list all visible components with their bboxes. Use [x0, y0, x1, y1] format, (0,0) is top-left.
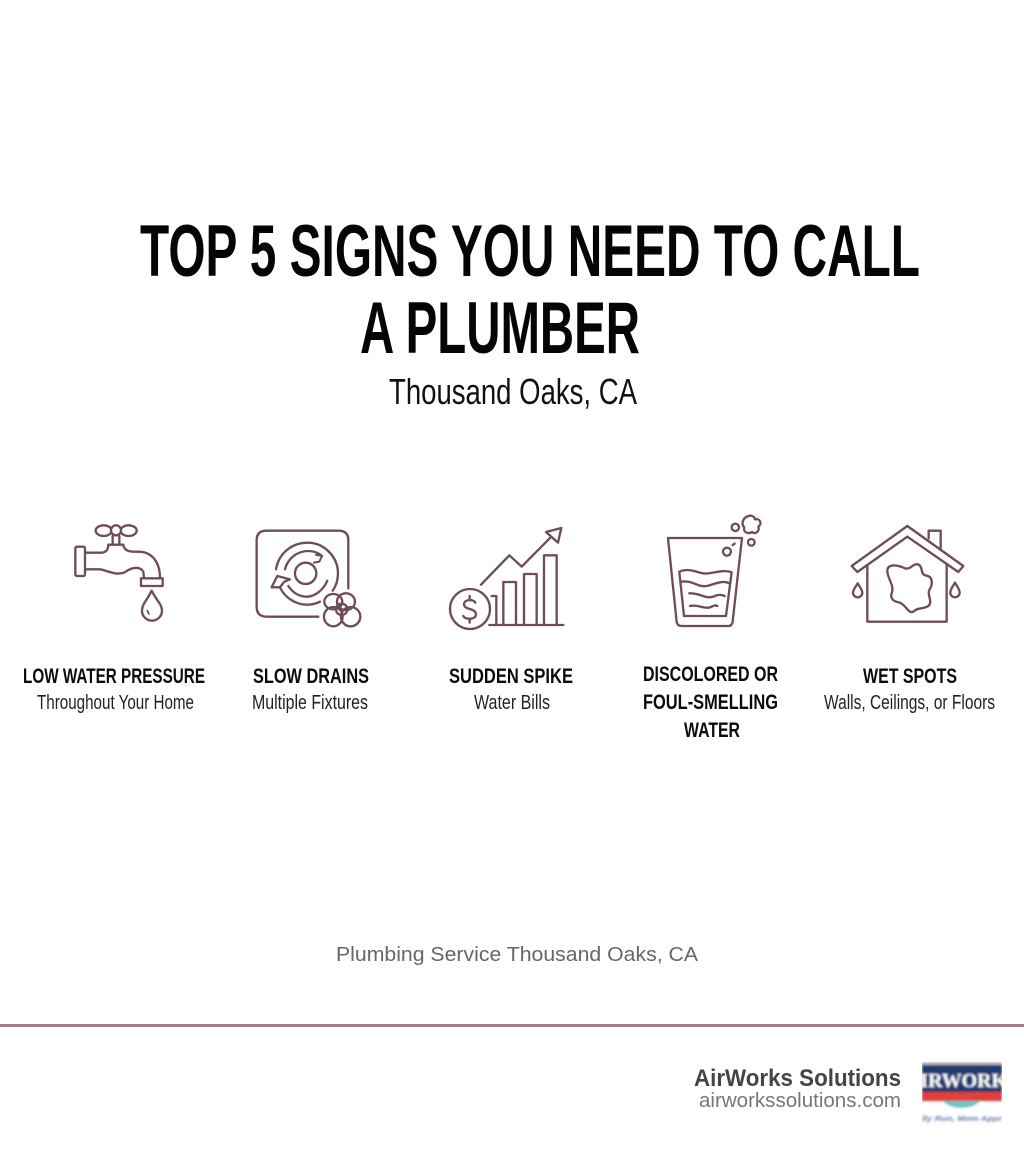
title: [140, 211, 920, 369]
icon: discolored water glass: [668, 516, 760, 626]
icon: house with wet spot: [852, 526, 963, 622]
sign 4 label: [643, 662, 778, 742]
caption: Plumbing Service Thousand Oaks, CA: [336, 943, 698, 966]
sign 4 label: FOUL-SMELLING: [643, 690, 778, 714]
title: A PLUMBER: [360, 288, 640, 369]
logo: [922, 1062, 1002, 1124]
sign 3 label: SUDDEN SPIKE: [449, 664, 573, 688]
sign 5 label: [824, 664, 995, 714]
icon: rising bills chart: [450, 528, 563, 629]
sign 5 label: WET SPOTS: [863, 664, 957, 688]
sign 1 label: LOW WATER PRESSURE: [23, 664, 205, 688]
sign 1 label: [23, 664, 205, 714]
brand url: airworkssolutions.com: [699, 1090, 901, 1112]
sign 2 label: [252, 664, 369, 714]
footer rule: [0, 1024, 1024, 1027]
sign 4 label: DISCOLORED OR: [643, 662, 778, 686]
logo: AIRWORKS: [906, 1070, 1018, 1092]
brand name: AirWorks Solutions: [694, 1065, 901, 1092]
logo: lly Run, Mom Appr: [922, 1116, 1004, 1123]
sign 4 label: WATER: [684, 718, 740, 742]
sign 1 label: Throughout Your Home: [37, 692, 194, 714]
sign 2 label: Multiple Fixtures: [252, 692, 368, 714]
sign 3 label: [449, 664, 573, 714]
icon: slow drain: [257, 531, 360, 626]
sign 2 label: SLOW DRAINS: [253, 664, 369, 688]
subtitle: Thousand Oaks, CA: [389, 371, 637, 412]
icon: dripping faucet: [75, 525, 163, 621]
sign 3 label: Water Bills: [474, 692, 550, 714]
